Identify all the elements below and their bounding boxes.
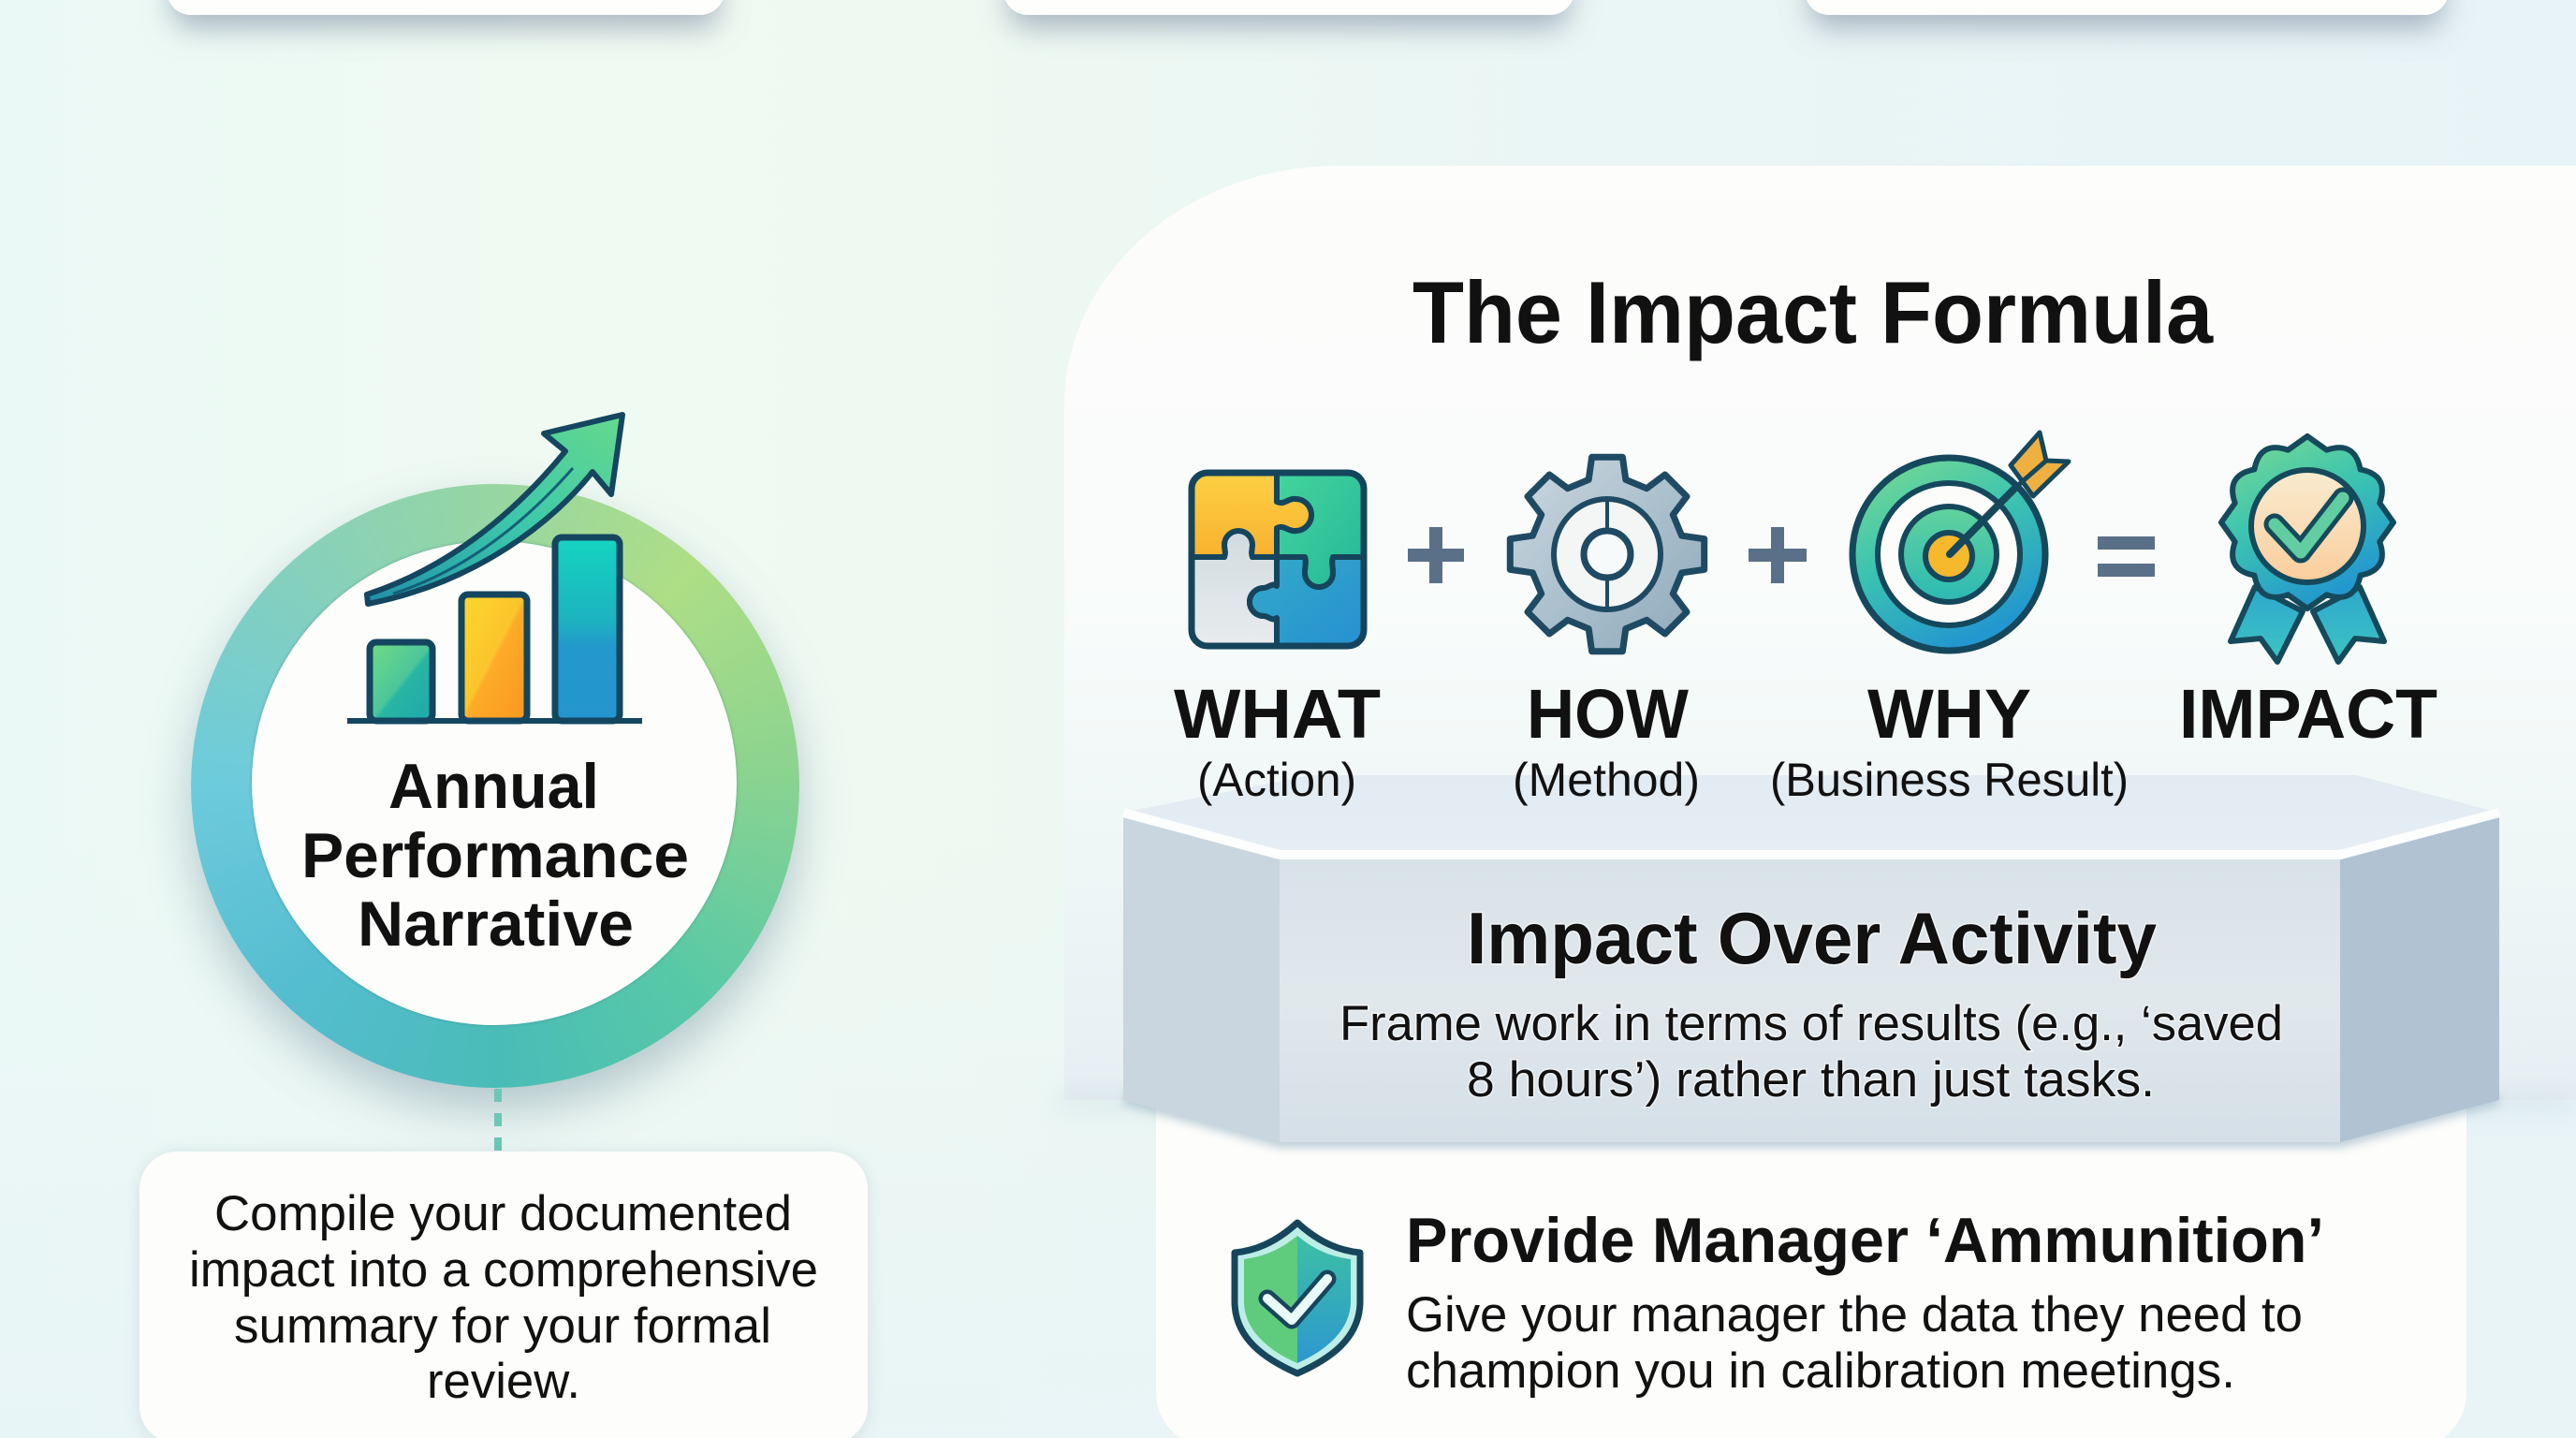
label: how [1513, 675, 1700, 806]
icon: plus sign 1 [1408, 527, 1464, 583]
icon: shield with check [1235, 1223, 1360, 1373]
label: why: (Business Result) [1770, 754, 2129, 806]
icon: equals sign [2098, 536, 2155, 577]
text: compile description: summary for your formal [234, 1299, 771, 1354]
gradient ring [191, 484, 799, 1088]
text: compile description: impact into a comprehensive [189, 1242, 818, 1298]
text: manager description: champion you in calibration meetings. [1406, 1343, 2235, 1399]
label: impact: IMPACT [2179, 675, 2437, 753]
icon: gear [1510, 457, 1705, 652]
label: what [1174, 675, 1381, 806]
label: why: WHY [1867, 675, 2031, 753]
heading: the impact formula: The Impact Formula [1412, 263, 2214, 361]
background wash lower [0, 843, 2576, 1438]
icon: rosette badge [2221, 436, 2393, 662]
panel: hexagonal slab impact over activity [1123, 775, 2499, 1148]
label: how: HOW [1527, 675, 1689, 753]
heading: annual performance narrative: Performance [301, 820, 689, 891]
heading: impact over activity: Impact Over Activity [1467, 897, 2157, 979]
text: compile description: review. [427, 1354, 580, 1409]
label: why [1770, 675, 2129, 806]
heading: provide manager ammunition: Provide Manager ‘Ammunition’ [1406, 1205, 2324, 1276]
top card 2 [1003, 0, 1574, 15]
panel: impact formula backdrop [1058, 166, 2576, 1110]
text: frame work description [1339, 996, 2283, 1108]
label: how: (Method) [1513, 754, 1700, 806]
text: compile description [189, 1186, 818, 1409]
top card 3 [1805, 0, 2449, 15]
panel: lower card manager ammunition [1156, 1095, 2466, 1438]
label: what: WHAT [1174, 675, 1381, 753]
text: frame work description: Frame work in terms of results (e.g., ‘saved [1339, 996, 2283, 1051]
text: frame work description: 8 hours’) rather than just tasks. [1467, 1052, 2155, 1108]
heading: annual performance narrative: Narrative [358, 888, 634, 960]
text: manager description: Give your manager the data they need to [1406, 1287, 2303, 1343]
heading: annual performance narrative [301, 751, 689, 960]
ring inner circle [252, 541, 737, 1025]
icon: target with arrow [1852, 433, 2069, 651]
icon: plus sign 2 [1749, 527, 1807, 583]
panel: compile card [139, 1152, 868, 1438]
top card 1 [167, 0, 724, 15]
connector: dashed line [494, 1089, 502, 1152]
label: what: (Action) [1197, 754, 1356, 806]
icon: bar chart with rising arrow [347, 415, 642, 724]
heading: annual performance narrative: Annual [388, 751, 599, 822]
text: compile description: Compile your documented [214, 1186, 792, 1241]
icon: puzzle [1192, 473, 1364, 646]
text: manager description [1406, 1287, 2303, 1399]
